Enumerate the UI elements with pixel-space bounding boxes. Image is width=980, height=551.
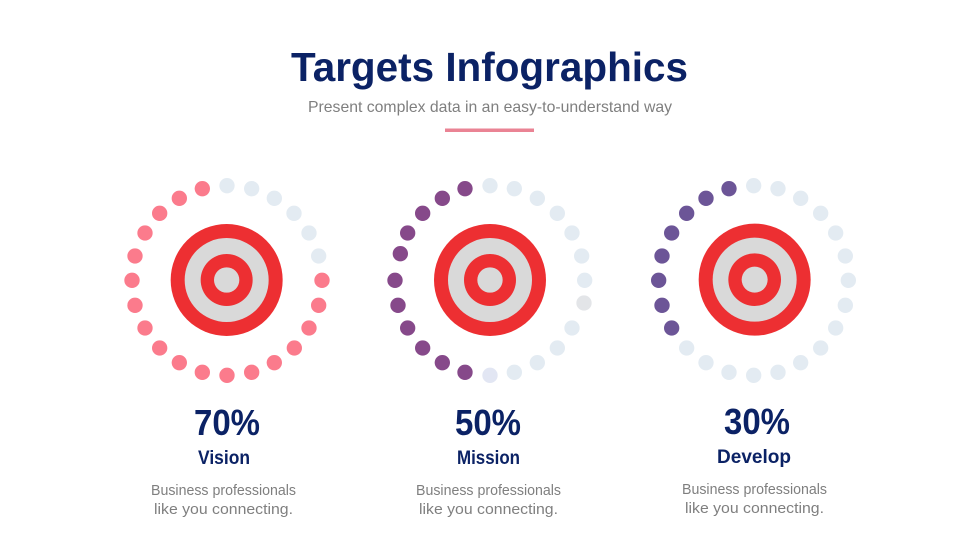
dot ring: 50 percent bbox=[387, 178, 592, 383]
percentage: 50%: 50% bbox=[455, 402, 521, 443]
subtitle: Present complex data in an easy-to-understand way bbox=[308, 99, 672, 116]
dot ring: 70 percent bbox=[124, 178, 330, 383]
description: mission bbox=[416, 482, 561, 518]
label: Develop: Develop bbox=[717, 447, 791, 468]
title underline accent bbox=[445, 128, 534, 132]
description: develop: Business professionals bbox=[682, 481, 827, 498]
icon: target bbox=[171, 224, 283, 336]
description: mission: like you connecting. bbox=[419, 501, 558, 518]
description: vision: like you connecting. bbox=[154, 501, 293, 518]
icon: target bbox=[699, 224, 811, 336]
panel: develop 30% bbox=[651, 178, 856, 517]
panel: vision 70% bbox=[124, 178, 330, 518]
icon: target bbox=[434, 224, 546, 336]
description: develop bbox=[682, 481, 827, 517]
panel: mission 50% bbox=[387, 178, 592, 518]
description: develop: like you connecting. bbox=[685, 500, 824, 517]
label: Mission: Mission bbox=[457, 448, 520, 469]
description: mission: Business professionals bbox=[416, 482, 561, 499]
dot ring: 30 percent bbox=[651, 178, 856, 383]
description: vision: Business professionals bbox=[151, 482, 296, 499]
label: Vision: Vision bbox=[198, 448, 250, 469]
title: Targets Infographics bbox=[291, 44, 688, 90]
percentage: 30%: 30% bbox=[724, 401, 790, 442]
percentage: 70%: 70% bbox=[194, 402, 260, 443]
description: vision bbox=[151, 482, 296, 518]
